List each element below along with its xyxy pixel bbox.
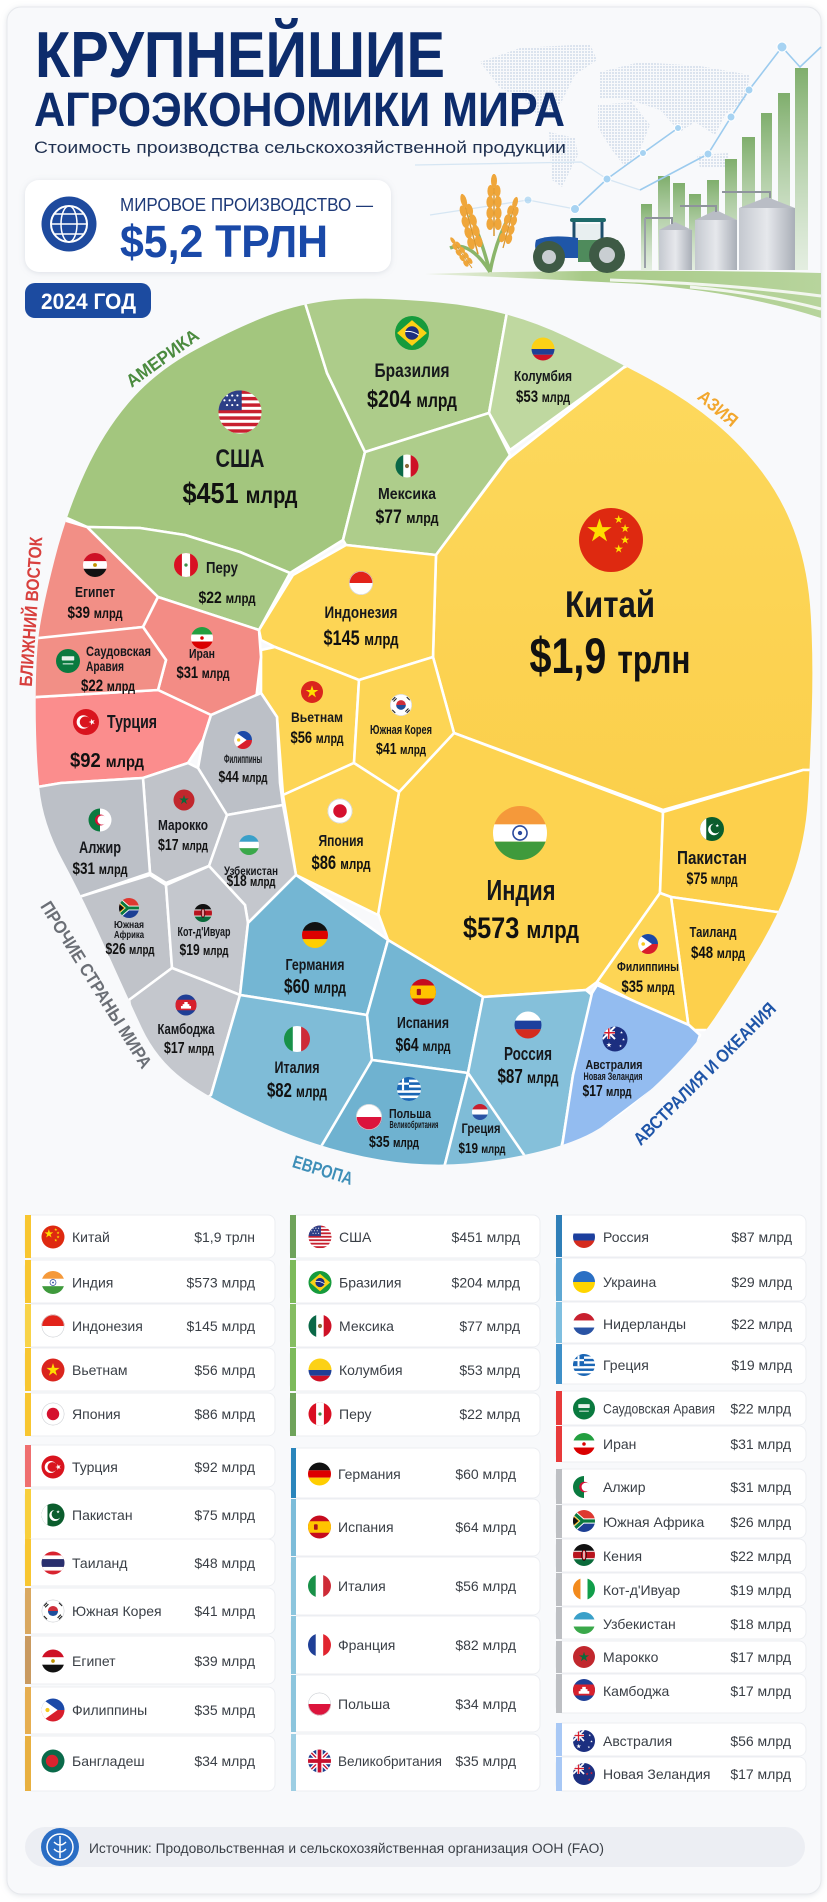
cell: Колумбия: Колумбия bbox=[514, 368, 572, 385]
row: Южная Африка: Южная Африка bbox=[603, 1514, 705, 1530]
row: Италия bbox=[291, 1557, 540, 1615]
cell: Австралия и Новая Зеландия: Новая Зеландия bbox=[584, 1071, 642, 1083]
cell: Колумбия bbox=[488, 314, 625, 448]
cell: Иран: Иран bbox=[189, 646, 215, 661]
cell: Япония: Япония bbox=[318, 833, 364, 850]
row: Перу bbox=[290, 1393, 540, 1436]
row: Перу: $22 млрд bbox=[459, 1406, 520, 1422]
row: Нидерланды: Нидерланды bbox=[603, 1316, 686, 1332]
row: Франция: $82 млрд bbox=[455, 1637, 516, 1653]
cell: Греция: Греция bbox=[462, 1120, 500, 1136]
row: Бразилия: Бразилия bbox=[339, 1274, 401, 1290]
cell: Италия: $82 млрд bbox=[267, 1080, 327, 1102]
row: США bbox=[290, 1215, 540, 1258]
year badge bbox=[25, 283, 151, 318]
cell: Филиппины (прочие) bbox=[198, 693, 283, 815]
row: Украина: $29 млрд bbox=[731, 1274, 792, 1290]
row: Греция: Греция bbox=[603, 1357, 649, 1373]
cell: Россия: Россия bbox=[504, 1044, 552, 1064]
row: Нидерланды: $22 млрд bbox=[731, 1316, 792, 1332]
cell: Индонезия bbox=[259, 545, 436, 680]
region label: Прочие страны мира: ПРОЧИЕ СТРАНЫ МИРА bbox=[36, 898, 156, 1072]
panel: world production: МИРОВОЕ ПРОИЗВОДСТВО — bbox=[120, 195, 373, 215]
cell: Камбоджа bbox=[128, 967, 238, 1096]
row: Филиппины bbox=[25, 1687, 275, 1734]
row: Китай: $1,9 трлн bbox=[194, 1229, 255, 1245]
row: Индия bbox=[25, 1260, 275, 1303]
region label: Европа: ЕВРОПА bbox=[290, 1152, 355, 1189]
row: Украина: Украина bbox=[603, 1274, 657, 1290]
row: Кот-д'Ивуар: Кот-д'Ивуар bbox=[603, 1582, 680, 1598]
cell: Бразилия: $204 млрд bbox=[367, 386, 457, 413]
year badge: 2024 ГОД bbox=[41, 289, 136, 314]
row: Япония bbox=[25, 1393, 275, 1436]
row: Австралия: Австралия bbox=[603, 1733, 672, 1749]
cell: Камбоджа: Камбоджа bbox=[158, 1021, 215, 1038]
row: Алжир: Алжир bbox=[603, 1479, 646, 1495]
source footer bbox=[25, 1827, 805, 1867]
cell: Египет: $39 млрд bbox=[68, 603, 123, 622]
row: Иран: Иран bbox=[603, 1436, 636, 1452]
cell: Перу: Перу bbox=[206, 560, 238, 577]
cell: Марокко: Марокко bbox=[158, 817, 208, 834]
region label: Азия: АЗИЯ bbox=[694, 386, 742, 431]
cell: Египет bbox=[38, 521, 158, 639]
row: Пакистан bbox=[25, 1489, 275, 1539]
cell: Италия bbox=[208, 994, 370, 1146]
dotted world map bbox=[480, 44, 750, 187]
row: Мексика: $77 млрд bbox=[459, 1318, 520, 1334]
cell: Китай: Китай bbox=[565, 584, 655, 625]
cell: США: США bbox=[216, 445, 264, 473]
row: США: $451 млрд bbox=[452, 1229, 520, 1245]
cell: Южная Корея bbox=[354, 657, 454, 792]
panel: world production: $5,2 ТРЛН bbox=[120, 216, 328, 267]
cell: Турция: $92 млрд bbox=[70, 750, 144, 772]
row: Мексика bbox=[290, 1304, 540, 1347]
row: Вьетнам bbox=[25, 1348, 275, 1391]
cell: Польша и Великобритания bbox=[320, 1058, 467, 1165]
cell: Иран: $31 млрд bbox=[176, 663, 230, 682]
row: Мексика: Мексика bbox=[339, 1318, 394, 1334]
treemap: agricultural production by country bbox=[20, 290, 827, 1180]
row: Саудовская Аравия: Саудовская Аравия bbox=[603, 1400, 715, 1416]
row: Марокко bbox=[556, 1641, 806, 1673]
cell: Филиппины (прочие): Филиппины bbox=[224, 752, 262, 766]
row: Китай: Китай bbox=[72, 1229, 110, 1245]
cell: Пакистан: $75 млрд bbox=[686, 869, 738, 888]
cell: Индонезия: $145 млрд bbox=[324, 627, 399, 650]
cell: Вьетнам: Вьетнам bbox=[291, 709, 343, 725]
cell: Германия: Германия bbox=[286, 957, 344, 974]
row: Украина bbox=[556, 1258, 806, 1301]
row: Германия: Германия bbox=[338, 1466, 401, 1482]
row: Испания: Испания bbox=[338, 1519, 394, 1535]
cell: Филиппины: Филиппины bbox=[617, 959, 679, 974]
row: Турция: $92 млрд bbox=[194, 1459, 255, 1475]
row: Южная Корея: $41 млрд bbox=[194, 1603, 255, 1619]
row: Южная Корея: Южная Корея bbox=[72, 1603, 162, 1619]
region label: Ближний Восток: БЛИЖНИЙ ВОСТОК bbox=[15, 535, 46, 687]
cell: Индия bbox=[378, 733, 663, 997]
row: Польша bbox=[291, 1675, 540, 1732]
row: Южная Корея bbox=[25, 1588, 275, 1634]
title: КРУПНЕЙШИЕ bbox=[35, 18, 445, 91]
tractor bbox=[533, 218, 625, 273]
icon: globe bbox=[42, 196, 96, 252]
cell: Саудовская Аравия bbox=[20, 627, 166, 698]
cell: Саудовская Аравия: Аравия bbox=[86, 658, 124, 674]
cell: Алжир bbox=[39, 776, 152, 895]
cell: Индия: Индия bbox=[486, 875, 556, 907]
row: Индонезия: Индонезия bbox=[72, 1318, 143, 1334]
cell: Турция: Турция bbox=[107, 712, 157, 732]
row: Камбоджа bbox=[556, 1674, 806, 1713]
grain silos bbox=[645, 192, 795, 270]
row: Турция: Турция bbox=[72, 1459, 118, 1475]
cell: Южная Африка: Южная bbox=[114, 920, 144, 931]
cell: Пакистан bbox=[658, 768, 810, 912]
row: Кения: Кения bbox=[603, 1548, 642, 1564]
illustration: farm, chart and world map bbox=[415, 42, 821, 318]
row: Индонезия bbox=[25, 1304, 275, 1347]
cell: Узбекистан: Узбекистан bbox=[224, 864, 278, 878]
cell: Мексика: Мексика bbox=[378, 486, 436, 503]
row: Иран bbox=[556, 1426, 806, 1462]
cell: Греция: $19 млрд bbox=[458, 1140, 506, 1157]
row: Новая Зеландия: Новая Зеландия bbox=[603, 1766, 710, 1782]
row: Бангладеш: Бангладеш bbox=[72, 1753, 145, 1769]
row: Иран: $31 млрд bbox=[730, 1436, 791, 1452]
row: Филиппины: $35 млрд bbox=[194, 1702, 255, 1718]
row: Саудовская Аравия: $22 млрд bbox=[730, 1400, 791, 1416]
row: Египет: Египет bbox=[72, 1653, 116, 1669]
cell: Мексика bbox=[343, 413, 510, 555]
cell: Польша и Великобритания: Великобритания bbox=[390, 1119, 439, 1131]
row: Таиланд bbox=[25, 1539, 275, 1586]
region label: Америка: АМЕРИКА bbox=[122, 325, 203, 391]
row: Австралия bbox=[556, 1723, 806, 1756]
row: Испания bbox=[291, 1499, 540, 1556]
row: Узбекистан bbox=[556, 1607, 806, 1639]
cell: Китай: $1,9 трлн bbox=[530, 628, 690, 684]
cell: Таиланд bbox=[671, 896, 778, 1030]
row: Бангладеш bbox=[25, 1736, 275, 1791]
row: Япония: Япония bbox=[72, 1406, 121, 1422]
row: Саудовская Аравия bbox=[556, 1391, 806, 1425]
row: Германия: $60 млрд bbox=[455, 1466, 516, 1482]
row: Алжир bbox=[556, 1469, 806, 1504]
row: Россия bbox=[556, 1215, 806, 1257]
row: Испания: $64 млрд bbox=[455, 1519, 516, 1535]
cell: Пакистан: Пакистан bbox=[677, 848, 747, 868]
row: Южная Африка bbox=[556, 1505, 806, 1538]
ground swoosh bbox=[425, 271, 821, 318]
row: Камбоджа: Камбоджа bbox=[603, 1683, 669, 1699]
cell: Индонезия: Индонезия bbox=[324, 603, 398, 622]
cell: Китай bbox=[433, 350, 827, 810]
row: Великобритания bbox=[291, 1734, 540, 1791]
cell: Филиппины: $35 млрд bbox=[622, 977, 675, 996]
row: Колумбия: Колумбия bbox=[339, 1362, 403, 1378]
row: Новая Зеландия: $17 млрд bbox=[730, 1766, 791, 1782]
row: Пакистан: Пакистан bbox=[72, 1507, 133, 1523]
cell: Узбекистан bbox=[209, 805, 296, 923]
panel: world production bbox=[25, 180, 391, 272]
row: Бангладеш: $34 млрд bbox=[194, 1753, 255, 1769]
cell: Алжир: Алжир bbox=[79, 838, 121, 857]
cell: Германия: $60 млрд bbox=[284, 976, 346, 998]
cell: Марокко bbox=[143, 763, 227, 883]
cell: Камбоджа: $17 млрд bbox=[164, 1040, 215, 1057]
cell: Перу: $22 млрд bbox=[198, 588, 256, 607]
row: Греция: $19 млрд bbox=[731, 1357, 792, 1373]
cell: Польша и Великобритания: Польша bbox=[389, 1106, 432, 1121]
table column 1 bbox=[25, 1215, 275, 1791]
cell: Марокко: $17 млрд bbox=[158, 837, 209, 854]
cell: Германия bbox=[240, 875, 388, 1015]
cell: Вьетнам: $56 млрд bbox=[290, 728, 344, 747]
cell: Южная Африка: $26 млрд bbox=[106, 941, 155, 958]
table column 2 bbox=[290, 1215, 540, 1791]
cell: Перу bbox=[87, 527, 290, 630]
row: Кения bbox=[556, 1539, 806, 1572]
cell: Филиппины bbox=[597, 893, 689, 1030]
cell: США: $451 млрд bbox=[182, 478, 298, 510]
row: Таиланд: Таиланд bbox=[72, 1555, 127, 1571]
cell: Австралия и Новая Зеландия: $17 млрд bbox=[582, 1083, 632, 1100]
cell: Колумбия: $53 млрд bbox=[516, 387, 570, 406]
row: Великобритания: $35 млрд bbox=[455, 1753, 516, 1769]
cell: Иран bbox=[143, 597, 261, 715]
row: Германия bbox=[291, 1448, 540, 1498]
cell: Саудовская Аравия: Саудовская bbox=[86, 643, 151, 659]
row: Польша: Польша bbox=[338, 1696, 390, 1712]
row: Великобритания: Великобритания bbox=[338, 1753, 442, 1769]
cell: Россия: $87 млрд bbox=[498, 1066, 558, 1088]
row: Колумбия: $53 млрд bbox=[459, 1362, 520, 1378]
row: Польша: $34 млрд bbox=[455, 1696, 516, 1712]
cell: Россия bbox=[468, 990, 592, 1170]
row: Бразилия: $204 млрд bbox=[452, 1274, 520, 1290]
trend lines bbox=[415, 42, 821, 215]
cell: Вьетнам bbox=[261, 647, 359, 795]
row: Кения: $22 млрд bbox=[730, 1548, 791, 1564]
row: Марокко: Марокко bbox=[603, 1649, 659, 1665]
cell: Южная Корея: $41 млрд bbox=[376, 741, 427, 758]
row: Бразилия bbox=[290, 1260, 540, 1303]
row: Франция bbox=[291, 1616, 540, 1674]
row: Китай bbox=[25, 1215, 275, 1258]
table column 3 bbox=[556, 1215, 806, 1791]
cell: Греция bbox=[444, 1073, 526, 1164]
cell: Южная Африка bbox=[80, 876, 170, 998]
icon: FAO logo bbox=[41, 1828, 79, 1866]
cell: США bbox=[67, 304, 364, 572]
row: Россия: Россия bbox=[603, 1229, 649, 1245]
row: Колумбия bbox=[290, 1348, 540, 1391]
row: Италия: $56 млрд bbox=[455, 1578, 516, 1594]
row: Индия: $573 млрд bbox=[187, 1274, 255, 1290]
row: Турция bbox=[25, 1445, 275, 1487]
row: Южная Африка: $26 млрд bbox=[730, 1514, 791, 1530]
row: Перу: Перу bbox=[339, 1406, 371, 1422]
row: Алжир: $31 млрд bbox=[730, 1479, 791, 1495]
row: Кот-д'Ивуар bbox=[556, 1573, 806, 1606]
row: Камбоджа: $17 млрд bbox=[730, 1683, 791, 1699]
row: Марокко: $17 млрд bbox=[730, 1649, 791, 1665]
row: Египет bbox=[25, 1636, 275, 1684]
growth bars bbox=[641, 68, 808, 270]
row: Новая Зеландия bbox=[556, 1757, 806, 1791]
cell: Италия: Италия bbox=[274, 1058, 320, 1077]
cell: Австралия и Новая Зеландия: Австралия bbox=[586, 1057, 642, 1072]
row: Индия: Индия bbox=[72, 1274, 113, 1290]
cell: Таиланд: Таиланд bbox=[690, 924, 737, 941]
row: Вьетнам: Вьетнам bbox=[72, 1362, 128, 1378]
row: Узбекистан: $18 млрд bbox=[730, 1616, 791, 1632]
cell: Кот-д'Ивуар bbox=[166, 866, 248, 995]
row: Таиланд: $48 млрд bbox=[194, 1555, 255, 1571]
row: Узбекистан: Узбекистан bbox=[603, 1616, 676, 1632]
cell: Алжир: $31 млрд bbox=[72, 859, 128, 878]
cell: Австралия и Новая Зеландия bbox=[561, 986, 698, 1146]
cell: Япония bbox=[283, 763, 399, 915]
row: Пакистан: $75 млрд bbox=[194, 1507, 255, 1523]
subtitle: Стоимость производства сельскохозяйственной продукции bbox=[34, 138, 566, 157]
cell: Филиппины (прочие): $44 млрд bbox=[218, 769, 268, 786]
row: Япония: $86 млрд bbox=[194, 1406, 255, 1422]
row: Вьетнам: $56 млрд bbox=[194, 1362, 255, 1378]
cell: Польша и Великобритания: $35 млрд bbox=[369, 1134, 420, 1151]
row: США: США bbox=[339, 1229, 372, 1245]
cell: Испания bbox=[367, 940, 483, 1073]
cell: Мексика: $77 млрд bbox=[376, 507, 439, 528]
row: Нидерланды bbox=[556, 1302, 806, 1343]
cell: Египет: Египет bbox=[75, 584, 115, 601]
row: Италия: Италия bbox=[338, 1578, 386, 1594]
cell: Южная Африка: Африка bbox=[114, 929, 144, 941]
row: Индонезия: $145 млрд bbox=[187, 1318, 255, 1334]
cell: Турция bbox=[36, 689, 210, 786]
cell: Саудовская Аравия: $22 млрд bbox=[81, 676, 135, 695]
row: Египет: $39 млрд bbox=[194, 1653, 255, 1669]
cell: Бразилия: Бразилия bbox=[374, 361, 450, 382]
title bbox=[34, 18, 565, 137]
cell: Испания: $64 млрд bbox=[396, 1035, 451, 1055]
row: Греция bbox=[556, 1344, 806, 1384]
row: Филиппины: Филиппины bbox=[72, 1702, 147, 1718]
cell: Испания: Испания bbox=[397, 1015, 449, 1032]
row: Франция: Франция bbox=[338, 1637, 395, 1653]
cell: Таиланд: $48 млрд bbox=[691, 943, 745, 962]
cell: Индия: $573 млрд bbox=[463, 912, 579, 945]
row: Австралия: $56 млрд bbox=[730, 1733, 791, 1749]
cell: Кот-д'Ивуар: Кот-д'Ивуар bbox=[178, 924, 231, 939]
cell: Южная Корея: Южная Корея bbox=[370, 723, 432, 737]
row: Кот-д'Ивуар: $19 млрд bbox=[730, 1582, 791, 1598]
cell: Узбекистан: $18 млрд bbox=[226, 873, 276, 890]
cell: Бразилия bbox=[304, 298, 506, 452]
source footer: Источник: Продовольственная и сельскохозяйственная организация ООН (FAO) bbox=[89, 1841, 604, 1856]
title: АГРОЭКОНОМИКИ МИРА bbox=[34, 84, 565, 137]
wheat bbox=[447, 174, 523, 272]
row: Россия: $87 млрд bbox=[731, 1229, 792, 1245]
region label: Австралия и Океания: АВСТРАЛИЯ И ОКЕАНИЯ bbox=[629, 998, 780, 1149]
cell: Япония: $86 млрд bbox=[312, 853, 371, 874]
cell: Кот-д'Ивуар: $19 млрд bbox=[180, 942, 229, 959]
